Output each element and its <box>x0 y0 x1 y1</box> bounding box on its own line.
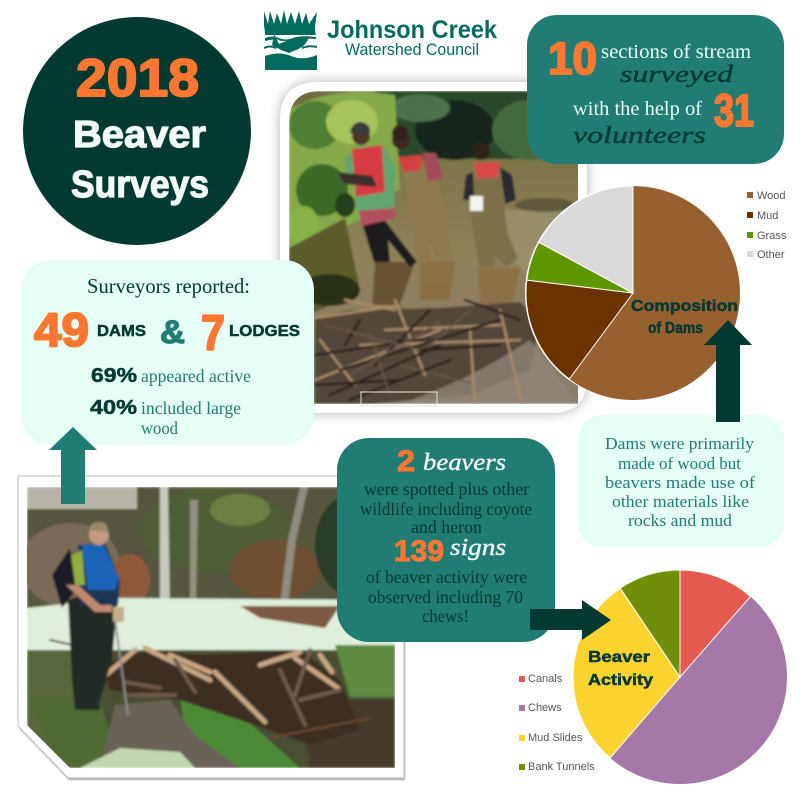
panel: surveyors reported: included large <box>141 398 241 418</box>
photo: man in waders at dam in a duckweed pond <box>20 487 395 768</box>
top stats panel: sections and volunteers <box>527 15 784 164</box>
photo frame: surveyor beside a beaver dam <box>18 476 405 780</box>
reflections <box>372 262 415 305</box>
pie chart: composition of dams <box>525 185 741 401</box>
panel: surveyors reported: DAMS <box>97 323 146 340</box>
legend: beaver activity <box>519 673 595 773</box>
legend: dam materials <box>747 190 787 261</box>
panel: surveyors reported: 69% <box>91 365 137 387</box>
top stats panel: sections and volunteers: with the help of <box>573 98 702 120</box>
legend: beaver activity: Chews <box>528 702 562 714</box>
pie chart: beaver activity: Activity <box>588 672 653 689</box>
panel: dams made of wood note: made of wood but <box>618 454 741 473</box>
panel: dams made of wood note: beavers made use of <box>605 473 755 492</box>
panel: surveyors reported: 40% <box>90 397 137 419</box>
photo frame: volunteers surveying a stream <box>280 82 590 413</box>
panel: dams made of wood note: Dams were primarily <box>605 434 755 453</box>
panel: beavers and signs observed: signs <box>450 535 506 561</box>
left bank foliage <box>289 92 400 250</box>
logo: Johnson Creek Watershed Council: Watershed Council <box>345 40 479 59</box>
pie chart: composition of dams: of Dams <box>648 320 703 337</box>
man <box>68 592 118 710</box>
panel: surveyors reported: appeared active <box>141 366 251 386</box>
muddy channel <box>100 700 240 768</box>
arrow: right to activity pie chart <box>530 600 611 640</box>
logo: Johnson Creek Watershed Council <box>264 10 497 70</box>
panel: surveyors reported <box>21 260 314 445</box>
panel: beavers and signs observed: and heron <box>411 517 482 537</box>
panel: beavers and signs observed: beavers <box>423 450 506 476</box>
arrow: up to dam pie chart <box>704 320 752 422</box>
legend: dam materials: Other <box>757 249 785 261</box>
panel: surveyors reported: Surveyors reported: <box>87 274 250 298</box>
top stats panel: sections and volunteers: 10 <box>548 33 597 84</box>
legend: dam materials: Wood <box>757 190 786 202</box>
legend: beaver activity: Bank Tunnels <box>528 761 595 773</box>
panel: beavers and signs observed: were spotted plus other <box>364 479 529 499</box>
dam logs <box>100 650 360 745</box>
photo: volunteers standing in the stream by a beaver dam <box>289 91 590 404</box>
legend: beaver activity: Canals <box>528 673 563 685</box>
top stats panel: sections and volunteers: 31 <box>714 85 754 136</box>
legend: dam materials: Mud <box>757 210 778 222</box>
far trees <box>374 91 527 160</box>
panel: dams made of wood note: other materials like <box>612 492 749 511</box>
person 1 <box>362 218 417 267</box>
pie chart: beaver activity: Beaver <box>588 649 650 666</box>
arrow: up to surveyors panel <box>49 427 97 504</box>
person 3 <box>472 186 518 267</box>
panel: beavers and signs observed: 139 <box>394 535 444 568</box>
panel: surveyors reported: & <box>160 314 185 350</box>
title circle <box>23 17 251 245</box>
panel: beavers and signs observed: observed including 70 <box>368 587 523 607</box>
top stats panel: sections and volunteers: sections of stream <box>601 41 751 63</box>
pie chart: beaver activity <box>573 570 787 784</box>
panel: beavers and signs observed: wildlife including coyote <box>360 499 532 519</box>
pale green water <box>27 598 395 660</box>
legend: dam materials: Grass <box>757 230 787 242</box>
panel: beavers and signs observed <box>337 438 555 642</box>
title circle: 2018 <box>76 49 199 108</box>
top stats panel: sections and volunteers: volunteers <box>573 123 706 149</box>
panel: surveyors reported: 7 <box>201 305 225 361</box>
pie chart: composition of dams: Composition <box>631 298 738 315</box>
panel: beavers and signs observed: of beaver activity were <box>366 567 527 587</box>
logo: Johnson Creek Watershed Council: Johnson Creek <box>327 16 497 44</box>
panel: beavers and signs observed: chews! <box>422 606 469 626</box>
top stats panel: sections and volunteers: surveyed <box>620 62 734 88</box>
small selection marker <box>361 392 437 406</box>
panel: beavers and signs observed: 2 <box>397 445 415 478</box>
title circle: Surveys <box>71 164 209 206</box>
grass and brush <box>27 650 74 750</box>
beaver dam sticks <box>315 302 540 404</box>
title circle: Beaver <box>73 114 206 156</box>
person 2 <box>403 165 453 262</box>
shaded water left <box>289 218 360 320</box>
panel: dams made of wood note: rocks and mud <box>628 511 733 530</box>
panel: surveyors reported: wood <box>141 418 178 438</box>
panel: surveyors reported: LODGES <box>229 323 300 340</box>
panel: dams made of wood note <box>578 415 784 547</box>
panel: surveyors reported: 49 <box>34 303 89 356</box>
legend: beaver activity: Mud Slides <box>528 732 583 744</box>
